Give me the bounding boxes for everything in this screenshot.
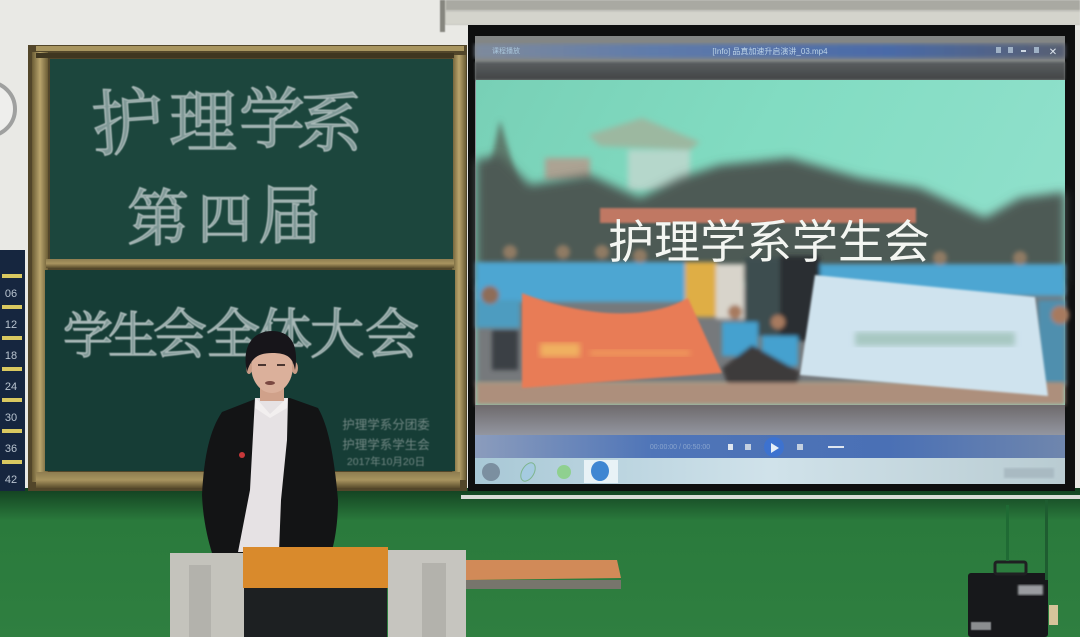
lectern: [170, 547, 466, 637]
chalk heading: general assembly: 会: [365, 305, 419, 365]
wall conduit: [1006, 500, 1048, 580]
face: [251, 339, 293, 393]
calendar strip: 24: [5, 381, 17, 393]
screen bottom bar: [461, 495, 1080, 499]
chalk heading: department name: 系: [295, 86, 366, 163]
ground: [476, 382, 1065, 405]
lower board panel: [45, 270, 455, 471]
chalk heading: department name: 护: [89, 82, 167, 166]
chalk heading: general assembly: [63, 305, 419, 365]
player title bar: [Info] 品真加速升启演讲_03.mp4: [712, 46, 828, 56]
player title bar: 课程播放: [492, 46, 520, 55]
speaker: [202, 331, 338, 553]
collar: [255, 398, 287, 418]
red back banner: [600, 208, 916, 223]
calendar strip: 06: [5, 288, 17, 300]
desktop taskbar: [475, 458, 1065, 484]
orange banner: [522, 293, 722, 388]
chalk heading: general assembly: 体: [258, 305, 312, 365]
green lower wall: [0, 488, 1080, 637]
lectern dark front: [244, 588, 387, 637]
jacket: [202, 398, 338, 553]
upper board panel: [50, 59, 453, 259]
wall: [0, 0, 1080, 500]
player controls: [475, 405, 1065, 458]
crowd in blue shirts: [476, 245, 1069, 392]
chalk signature: 2017年10月20日: [347, 455, 425, 468]
ceiling projector housing: [440, 0, 1080, 32]
board divider rail: [46, 259, 454, 268]
crowd backdrop: [476, 285, 1065, 385]
chalk heading: general assembly: 全: [206, 305, 260, 365]
lectern right panel: [388, 550, 466, 637]
calendar strip: 42: [5, 474, 17, 486]
video frame: group photo: [476, 80, 1069, 405]
player controls: 00:00:00 / 00:50:00: [650, 444, 710, 451]
projector screen: [468, 25, 1075, 491]
chalk heading: department name: 学: [239, 84, 305, 157]
tree line: [476, 155, 1065, 285]
chalk heading: department name: [89, 82, 366, 166]
chalk signature: 护理学系学生会: [342, 437, 430, 452]
calendar strip: [0, 250, 25, 491]
calendar strip: 18: [5, 350, 17, 362]
white banner: [800, 275, 1048, 396]
player title bar: ✕: [1049, 47, 1057, 58]
lectern orange top: [243, 547, 388, 588]
eyes and mouth: [258, 364, 285, 385]
calendar strip: 30: [5, 412, 17, 424]
neck: [260, 385, 284, 401]
chalk heading: fourth session: [127, 181, 322, 254]
chalk heading: fourth session: 第: [127, 186, 189, 254]
loudspeaker box: [968, 562, 1058, 637]
chalk heading: general assembly: 大: [310, 305, 364, 365]
distant building: [485, 118, 700, 190]
lectern left panel: [170, 553, 244, 637]
hair: [246, 331, 296, 372]
chalk signature: [342, 417, 430, 468]
chalk heading: general assembly: 生: [108, 308, 158, 364]
calendar strip: 12: [5, 319, 17, 331]
chalk heading: general assembly: 会: [153, 305, 207, 365]
chalk heading: department name: 理: [169, 85, 237, 161]
calendar strip: 36: [5, 443, 17, 455]
lapel pin: [239, 452, 245, 458]
ears: [246, 362, 298, 374]
pull-out shelf: [466, 560, 621, 589]
chalk heading: fourth session: 四: [198, 190, 252, 250]
chalk heading: fourth session: 届: [258, 181, 322, 252]
chalk signature: 护理学系分团委: [342, 417, 430, 432]
chalk heading: general assembly: 学: [63, 308, 113, 364]
shirt: [238, 398, 288, 552]
blackboard frame: [28, 45, 467, 491]
screen caption: 护理学系学生会: [608, 216, 930, 268]
player title bar: [475, 36, 1065, 80]
wall clock: [0, 82, 15, 136]
